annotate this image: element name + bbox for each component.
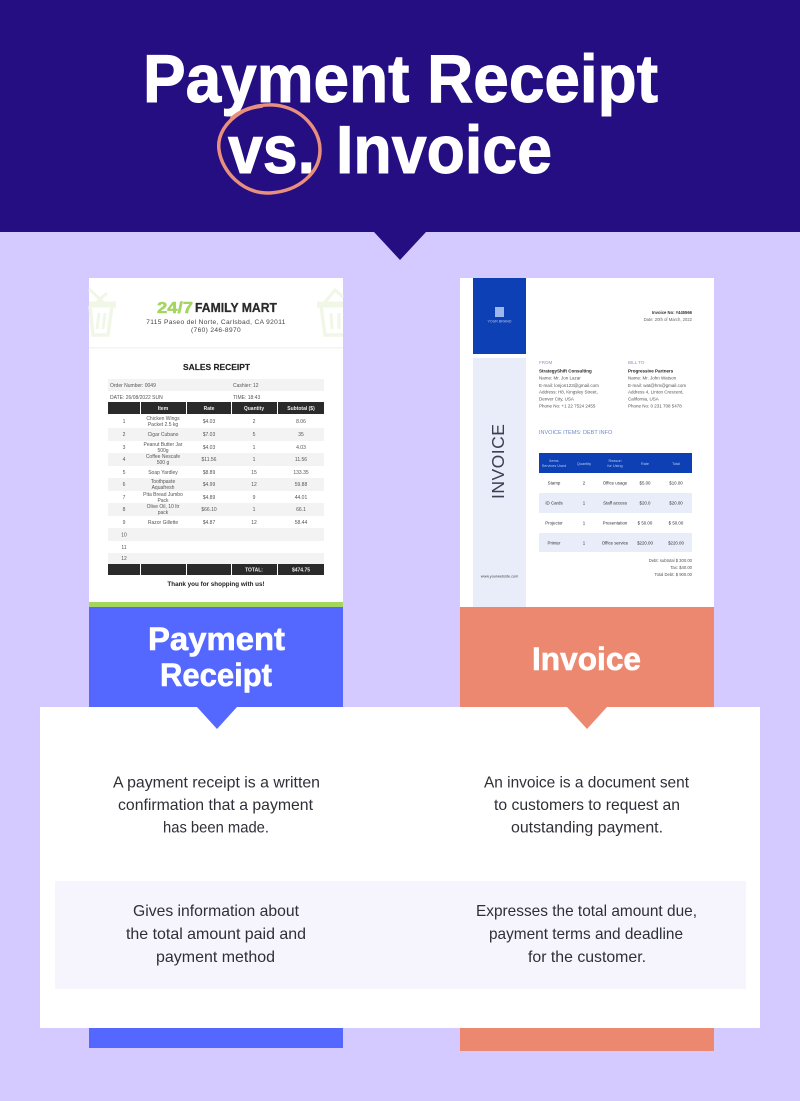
invoice table: for Using [607, 464, 623, 468]
store address [146, 319, 286, 334]
receipt table: $4.99 [203, 482, 215, 488]
receipt table: 66.1 [296, 507, 306, 513]
invoice table: Staff access [603, 500, 628, 506]
bill to block: BILL TO [628, 360, 645, 365]
from block: Address: H8, Kingsley Street, [539, 390, 598, 394]
logo block: YOUR BRAND [488, 320, 512, 324]
store name: 24/7 [157, 300, 193, 317]
invoice table: Presentation [603, 520, 628, 526]
definition: invoice: to customers to request an [494, 797, 680, 814]
invoice table: Projector [545, 520, 563, 526]
receipt table: Peanut Butter Jar [144, 442, 183, 448]
receipt table: TOTAL: [245, 568, 263, 574]
purpose: invoice [476, 903, 697, 966]
receipt table: 12 [251, 482, 257, 488]
receipt table: 1 [253, 507, 256, 513]
invoice totals: Debt: subtotal $ 300.00 [649, 558, 693, 563]
payment receipt label: Receipt [160, 657, 272, 693]
definition: invoice [484, 774, 690, 836]
bill to block: Address 4, Linton Crescent, [628, 390, 684, 394]
vertical invoice label: INVOICE [488, 424, 508, 499]
receipt table: 8.06 [296, 419, 306, 425]
store name: FAMILY MART [195, 301, 277, 315]
receipt table: DATE: 26/08/2022 SUN [110, 395, 163, 401]
invoice table: 1 [583, 500, 586, 506]
store address: 7115 Paseo del Norte, Carlsbad, CA 92011 [146, 319, 286, 326]
receipt table: 11 [121, 545, 127, 551]
receipt table: Aquafresh [152, 485, 175, 491]
receipt table: 2 [253, 419, 256, 425]
definition: payment receipt: confirmation that a payment [118, 797, 314, 814]
invoice table: Office usage [603, 480, 628, 486]
receipt table: 12 [251, 520, 257, 526]
receipt table: Quantity [244, 406, 264, 412]
receipt table: Razor Gillette [148, 520, 178, 526]
receipt table: $4.89 [203, 495, 215, 501]
receipt table [108, 379, 324, 575]
receipt table: $4.87 [203, 520, 215, 526]
receipt table: 500 g [157, 460, 169, 466]
bill to block: Progressive Partners [628, 368, 674, 374]
invoice table: Items [549, 459, 559, 463]
receipt table: Order Number: 0049 [110, 383, 156, 389]
receipt table: Soap Yardley [148, 470, 178, 476]
receipt table: 44.01 [295, 495, 307, 501]
invoice table: 2 [583, 480, 586, 486]
invoice table: $5.00 [640, 480, 651, 486]
receipt table: $474.75 [292, 568, 310, 574]
invoice table: Services Used [542, 464, 566, 468]
invoice table: Printer [548, 540, 561, 546]
receipt table: Packet 2.5 kg [148, 422, 178, 428]
receipt table: Rate [204, 406, 215, 412]
receipt table: $8.89 [203, 470, 215, 476]
purpose: invoice: payment terms and deadline [489, 926, 683, 943]
receipt table: $11.56 [202, 457, 217, 463]
invoice meta: Date: 20th of March, 2022 [644, 317, 693, 322]
receipt table: Coffee Nescafe [146, 454, 180, 460]
receipt table: 9 [253, 495, 256, 501]
invoice table: $ 50.00 [638, 520, 653, 526]
receipt table: $66.10 [201, 507, 217, 513]
invoice table: 1 [583, 520, 586, 526]
side strip [473, 358, 526, 607]
invoice table: $ 50.00 [669, 520, 684, 526]
definition: payment receipt: has been made. [163, 820, 269, 836]
receipt table: Olive Oil, 10 ltr [147, 504, 180, 510]
title: Payment Receipt [143, 41, 658, 117]
invoice table: 1 [583, 540, 586, 546]
receipt table: pack [158, 510, 169, 516]
column base: invoice [460, 607, 714, 1051]
invoice document [460, 278, 714, 607]
receipt table: Cashier: 12 [233, 383, 259, 389]
purpose: payment receipt: the total amount paid and [126, 926, 306, 943]
receipt table: Toothpaste [151, 479, 175, 485]
from block: Name: Mr. Jon Lazar [539, 376, 581, 380]
receipt table: 11.56 [295, 457, 307, 463]
payment receipt label: Payment [148, 621, 285, 657]
bill to block [628, 360, 686, 408]
invoice table: $10.00 [669, 480, 683, 486]
icon: basket right [317, 290, 343, 335]
receipt table: 15 [251, 470, 257, 476]
logo block [473, 278, 526, 354]
invoice table: Total [672, 462, 680, 466]
from block: StrategyShift Consulting [539, 368, 592, 374]
invoice table: $20.0 [640, 500, 651, 506]
bill to block: E-mail: wat@hm@gmail.com [628, 383, 686, 388]
definition: invoice: outstanding payment. [511, 820, 663, 836]
receipt table: Pack [157, 498, 169, 504]
sales receipt document [89, 278, 343, 607]
invoice totals [649, 558, 693, 577]
invoice table: Quantity [577, 462, 591, 466]
receipt table: 3 [123, 445, 126, 451]
receipt footer: Thank you for shopping with us! [167, 581, 265, 588]
bill to block: Phone No: 0 231 708 5478 [628, 404, 682, 408]
from block: Phone No: +1 22 7524 2455 [539, 404, 596, 408]
bill to block: California, USA [628, 396, 659, 402]
invoice meta [644, 310, 693, 322]
receipt table: 6 [123, 482, 126, 488]
receipt table: 59.88 [295, 482, 307, 488]
receipt table: 5 [253, 432, 256, 438]
receipt table: 10 [121, 532, 127, 538]
icon: basket left [89, 289, 116, 335]
receipt table: 7 [123, 495, 126, 501]
definition: payment receipt [113, 774, 320, 836]
payment receipt label [148, 621, 285, 693]
invoice items heading: INVOICE ITEMS: DEBT INFO [539, 430, 613, 436]
purpose: invoice: for the customer. [528, 949, 646, 966]
receipt table: 1 [253, 457, 256, 463]
receipt table: Subtotal ($) [287, 406, 315, 412]
invoice meta: Invoice No: #445566 [652, 310, 693, 315]
invoice label: Invoice [532, 641, 641, 677]
website: www.yourwebsite.com [481, 574, 518, 578]
receipt table: 35 [298, 432, 304, 438]
column base: payment receipt [89, 607, 343, 1048]
receipt table: Chicken Wings [146, 416, 180, 422]
receipt table: Cigar Cubano [148, 432, 179, 438]
from block: E-mail: lonjon123@gmail.com [539, 383, 599, 388]
receipt table: $7.03 [203, 432, 215, 438]
store address: (760) 246-8970 [191, 327, 241, 334]
receipt table: Pita Bread Jumbo [143, 492, 183, 498]
invoice table: Office service [602, 540, 629, 546]
purpose: invoice: Expresses the total amount due, [476, 903, 697, 920]
purpose: payment receipt: payment method [156, 949, 275, 966]
receipt table: TIME: 18:43 [233, 395, 260, 401]
store name [157, 300, 277, 317]
purpose: payment receipt [126, 903, 306, 966]
title [143, 41, 658, 188]
from block: Denver City, USA [539, 396, 574, 402]
hand-drawn circle around vs. [219, 105, 320, 193]
receipt table: 4 [123, 457, 126, 463]
receipt table: 1 [123, 419, 126, 425]
invoice table: Reason [608, 459, 622, 463]
title: Invoice [336, 112, 552, 188]
invoice table: $220.00 [637, 540, 653, 546]
invoice totals: Tax: $40.00 [670, 565, 693, 570]
definition: payment receipt: A payment receipt is a written [113, 774, 320, 792]
comparison card [40, 707, 760, 1028]
invoice table: Stamp [548, 480, 561, 486]
invoice table: $20.00 [669, 500, 683, 506]
receipt table: 58.44 [295, 520, 307, 526]
receipt table: 12 [121, 556, 127, 562]
receipt table: 5 [123, 470, 126, 476]
bill to block: Name: Mr. John Watson [628, 376, 677, 380]
invoice table [539, 453, 692, 552]
invoice totals: Total Debt: $ 900.00 [655, 572, 693, 577]
invoice table: Rate [641, 462, 649, 466]
receipt table: 133.35 [293, 470, 309, 476]
header banner [0, 0, 800, 260]
receipt table: 8 [123, 507, 126, 513]
receipt table: Item [158, 406, 169, 412]
receipt table: 4.03 [296, 445, 306, 451]
invoice table: ID Cards [545, 500, 563, 506]
invoice table: $220.00 [668, 540, 684, 546]
definition: invoice: An invoice is a document sent [484, 774, 690, 792]
receipt table: 500g [157, 448, 169, 454]
from block [539, 360, 599, 408]
receipt table: 2 [123, 432, 126, 438]
from block: FROM [539, 360, 552, 365]
receipt table: 1 [253, 445, 256, 451]
purpose: payment receipt: Gives information about [133, 903, 300, 920]
receipt table: 9 [123, 520, 126, 526]
receipt table: $4.03 [203, 445, 215, 451]
receipt heading: SALES RECEIPT [183, 362, 251, 372]
title: vs. [228, 112, 315, 188]
receipt table: $4.03 [203, 419, 215, 425]
